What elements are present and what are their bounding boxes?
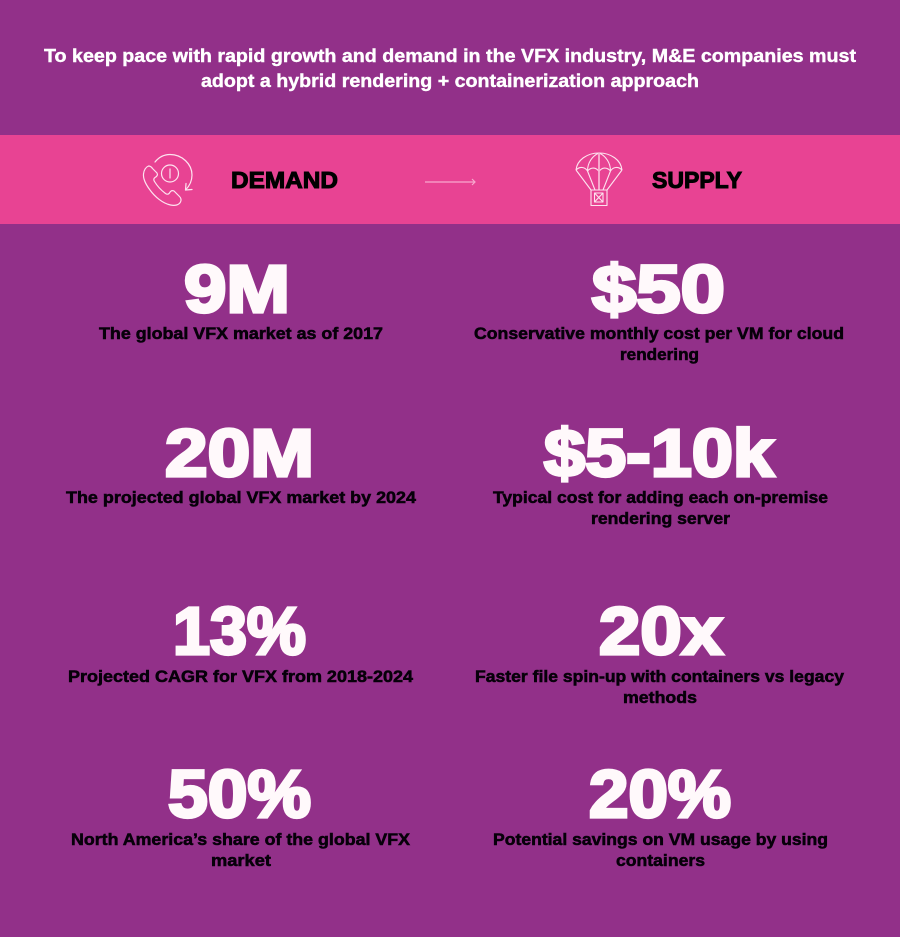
stat: 50%: 50% (168, 758, 311, 832)
heading: demand: DEMAND (231, 167, 338, 193)
stat: $5-10k (493, 417, 828, 528)
stat: 9M (99, 253, 383, 343)
stat: $50 (474, 253, 844, 364)
stat: 20M: 20M (165, 417, 314, 491)
title (44, 46, 856, 91)
icon: phone with refresh arrow (143, 154, 192, 205)
stat: $5-10k: rendering server (591, 509, 730, 528)
arrow (425, 179, 475, 185)
title: adopt a hybrid rendering + containerization approach (201, 71, 699, 91)
title: To keep pace with rapid growth and demand in the VFX industry, M&E companies must (44, 46, 856, 66)
stat: $5-10k: Typical cost for adding each on-premise (493, 488, 828, 507)
stat: 20%: Potential savings on VM usage by using (493, 830, 828, 849)
stat: 9M: 9M (184, 253, 290, 327)
pink band: demand to supply (0, 135, 900, 224)
stat: 9M: The global VFX market as of 2017 (99, 324, 383, 343)
stat: 20%: 20% (589, 758, 731, 832)
stat: 20% (493, 758, 828, 870)
stat: 20%: containers (616, 851, 705, 870)
stat: 13%: Projected CAGR for VFX from 2018-2024 (68, 667, 414, 686)
stat: 50%: market (211, 851, 271, 870)
stat: 20x (475, 595, 845, 707)
stat: $5-10k: $5-10k (544, 417, 775, 491)
stat: $50: $50 (592, 253, 725, 327)
stat: 20x: methods (623, 688, 697, 707)
stat: $50: Conservative monthly cost per VM for cloud (474, 324, 844, 343)
stat: 13%: 13% (173, 595, 306, 669)
stat: 20x: Faster file spin-up with containers vs legacy (475, 667, 845, 686)
stat: 50% (71, 758, 411, 870)
stat: 20x: 20x (599, 595, 723, 669)
stat: $50: rendering (620, 345, 699, 364)
heading: supply: SUPPLY (652, 167, 742, 193)
stat: 50%: North America’s share of the global VFX (71, 830, 411, 849)
stat: 20M: The projected global VFX market by 2024 (66, 488, 417, 507)
stat: 13% (68, 595, 414, 686)
stat: 20M (66, 417, 417, 507)
icon: parachute with crate (576, 153, 622, 206)
